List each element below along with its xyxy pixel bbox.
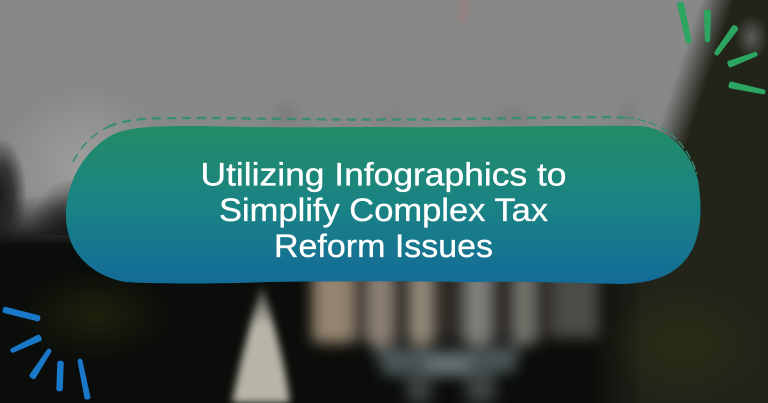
antenna and roof tones <box>459 0 468 22</box>
columns of the building <box>310 270 600 403</box>
title: Utilizing Infographics to <box>200 156 566 192</box>
title <box>200 156 566 264</box>
icon: green burst strokes top right <box>679 4 764 93</box>
pale spire <box>232 284 290 403</box>
teal title banner <box>66 126 700 284</box>
icon: blue burst strokes bottom left <box>5 309 88 397</box>
dashed outline arc above banner <box>73 117 697 174</box>
title: Simplify Complex Tax <box>219 192 548 228</box>
title: Reform Issues <box>274 228 493 264</box>
soft lower and side darks <box>0 260 768 403</box>
